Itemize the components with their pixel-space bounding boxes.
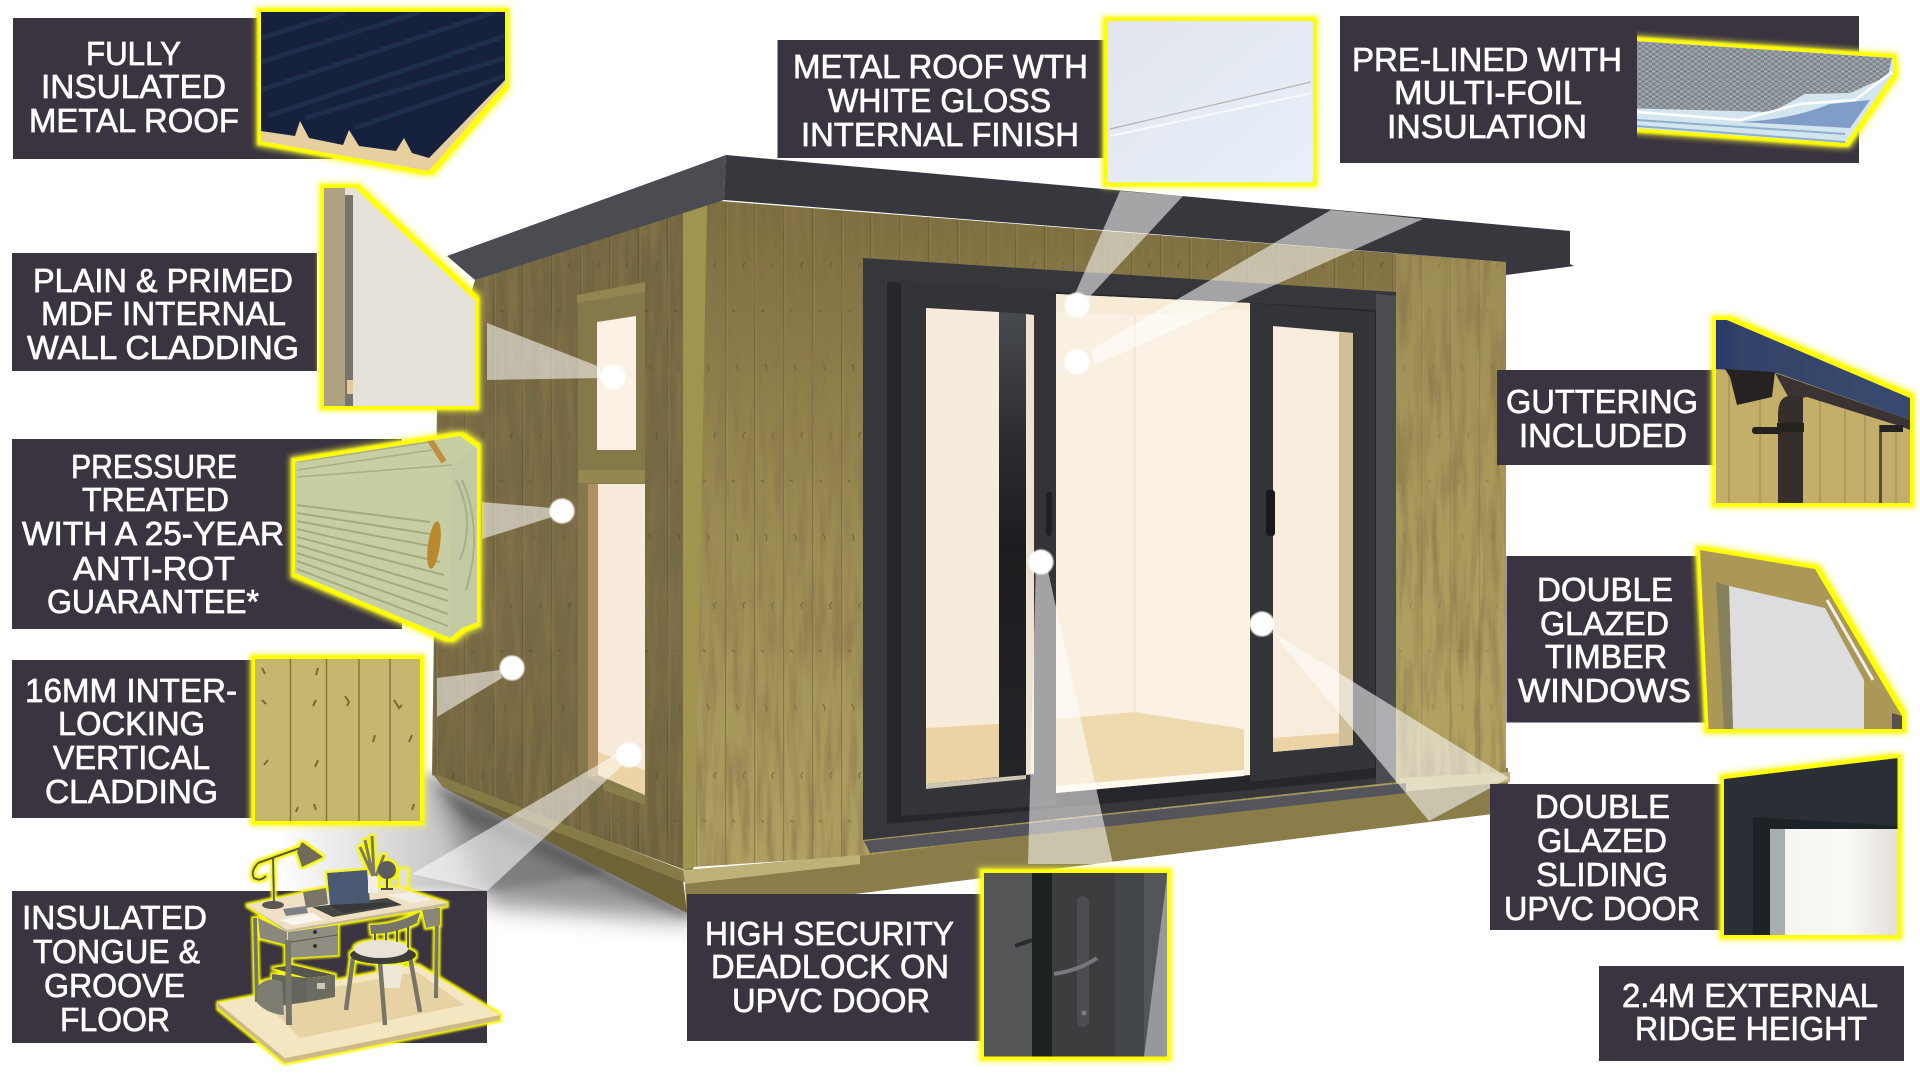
label: guttering included [1497, 370, 1722, 465]
label: pre-lined with multi-foil: MULTI-FOIL [1394, 74, 1582, 111]
marker dots [500, 292, 1274, 768]
left door glass [926, 308, 1034, 789]
corner post [683, 200, 707, 870]
image: white gloss ceiling [1107, 21, 1313, 182]
label: high security deadlock: UPVC DOOR [732, 982, 930, 1019]
plinth backing [685, 768, 1508, 915]
floor platform [218, 965, 500, 1063]
label: insulated floor [12, 891, 487, 1043]
pipe brackets [1752, 427, 1782, 434]
label: pressure treated [12, 439, 402, 629]
label: 2.4m external ridge height: RIDGE HEIGHT [1635, 1010, 1867, 1047]
label: plain and primed MDF: MDF INTERNAL [41, 295, 286, 332]
gutter run [1775, 373, 1910, 430]
label: plain and primed MDF: PLAIN & PRIMED [33, 262, 293, 299]
label: double glazed timber windows: TIMBER [1545, 638, 1667, 675]
label: 2.4m external ridge height [1599, 966, 1904, 1061]
label: pressure treated: GUARANTEE* [47, 583, 259, 620]
image: metal roof panel [261, 12, 505, 171]
image: pressure treated timber [295, 436, 477, 638]
label: double glazed sliding upvc door [1490, 784, 1730, 930]
label: 2.4m external ridge height: 2.4M EXTERNAL [1622, 977, 1878, 1014]
label: double glazed timber windows: DOUBLE [1537, 571, 1673, 608]
label: double glazed timber windows: WINDOWS [1518, 672, 1691, 709]
pointer beams [412, 191, 1509, 891]
side window [577, 282, 645, 805]
image: sliding door frame corner [1724, 758, 1898, 935]
mat and laptop [312, 870, 402, 917]
image: vertical cladding sample [255, 659, 420, 821]
desk front leg [288, 940, 289, 1025]
label: insulated floor: TONGUE & [33, 933, 200, 970]
label: high security deadlock: HIGH SECURITY [705, 915, 954, 952]
lamp [253, 842, 323, 909]
chair [346, 912, 420, 1025]
sliding door frame [863, 258, 1396, 840]
label: guttering included: GUTTERING [1506, 383, 1698, 420]
left side wall [432, 206, 707, 870]
label: 16mm interlocking cladding: LOCKING [58, 705, 205, 742]
desk top [247, 887, 447, 932]
label: double glazed sliding upvc door: SLIDING [1536, 856, 1668, 893]
garden room building [420, 155, 1574, 915]
label: fully insulated metal roof: FULLY [86, 35, 181, 72]
label: plain and primed MDF: WALL CLADDING [27, 329, 299, 366]
label: high security deadlock: DEADLOCK ON [711, 948, 949, 985]
label: double glazed sliding upvc door: DOUBLE [1535, 788, 1670, 825]
label: metal roof with white gloss: METAL ROOF WTH [793, 48, 1088, 85]
label: double glazed timber windows: GLAZED [1540, 605, 1669, 642]
image: door deadlock close-up [984, 873, 1167, 1056]
roof [447, 155, 1574, 280]
label: plain and primed MDF [12, 253, 317, 371]
label: metal roof with white gloss: INTERNAL FINISH [801, 116, 1079, 153]
ground shadow [277, 772, 695, 922]
label: pre-lined with multi-foil: INSULATION [1387, 108, 1587, 145]
bag [257, 979, 284, 1015]
storage boxes [272, 965, 335, 1007]
label: 16mm interlocking cladding: CLADDING [45, 773, 218, 810]
label: pressure treated: WITH A 25-YEAR [22, 515, 284, 552]
image: MDF wall cladding section [324, 188, 476, 406]
plant, globe and cup [360, 836, 408, 893]
label: pressure treated: TREATED [82, 481, 229, 518]
label: fully insulated metal roof: METAL ROOF [29, 102, 239, 139]
plinth base [432, 772, 1510, 915]
label: high security deadlock [687, 894, 982, 1041]
right door glass [1273, 326, 1353, 752]
label: double glazed sliding upvc door: UPVC DOOR [1504, 890, 1700, 927]
label: 16mm interlocking cladding: VERTICAL [53, 739, 210, 776]
label: 16mm interlocking cladding [12, 660, 262, 818]
image: desk on tongue and groove floor [218, 836, 500, 1063]
image: timber window corner [1700, 550, 1902, 729]
down pipe [1778, 396, 1803, 503]
label: pre-lined with multi-foil: PRE-LINED WITH [1352, 41, 1622, 78]
desk back legs [255, 908, 437, 1002]
label: insulated floor: GROOVE [44, 967, 185, 1004]
label: double glazed timber windows [1506, 556, 1706, 722]
front wall cladding [690, 190, 1520, 890]
gutter end cap [1725, 369, 1775, 405]
label: fully insulated metal roof: INSULATED [41, 68, 226, 105]
label: metal roof with white gloss [778, 40, 1112, 158]
label: double glazed sliding upvc door: GLAZED [1537, 822, 1667, 859]
label: metal roof with white gloss: WHITE GLOSS [828, 82, 1051, 119]
waste bin [377, 965, 403, 988]
desk apron and drawers [258, 908, 440, 958]
label: insulated floor: FLOOR [60, 1001, 170, 1038]
label: 16mm interlocking cladding: 16MM INTER- [25, 672, 237, 709]
image: multi-foil insulation [1620, 40, 1894, 143]
label: pressure treated: PRESSURE [71, 448, 237, 485]
label: insulated floor: INSULATED [22, 899, 207, 936]
room interior [1056, 294, 1250, 793]
image: guttering detail [1716, 320, 1910, 503]
fascia board [1716, 320, 1910, 420]
books and papers [280, 888, 432, 925]
door threshold [864, 783, 1406, 853]
door handles [1046, 490, 1275, 536]
label: pre-lined with multi-foil [1340, 16, 1859, 163]
label: guttering included: INCLUDED [1519, 417, 1687, 454]
label: pressure treated: ANTI-ROT [73, 550, 235, 587]
label: fully insulated metal roof [13, 18, 333, 159]
